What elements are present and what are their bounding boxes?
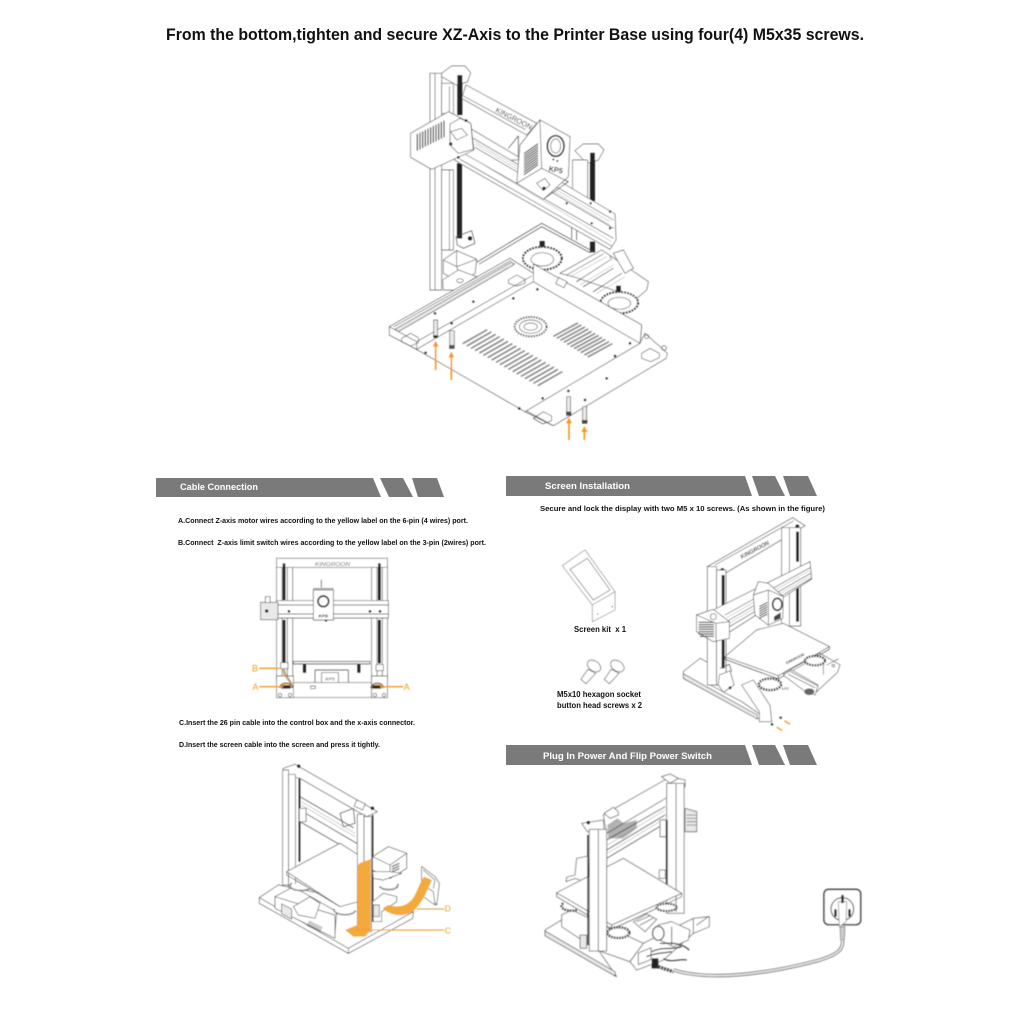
screen kit and screw parts: [562, 550, 626, 684]
left column: [283, 770, 295, 888]
base: [259, 885, 413, 953]
orange cable C: [345, 859, 371, 937]
callout D: D: [445, 904, 451, 914]
bed and base: [277, 661, 387, 698]
rear frame and gantry: [603, 774, 697, 913]
icon: hexagon socket screws: [581, 658, 626, 684]
diagram: front view with motor and limit switch callouts: [252, 558, 410, 698]
base: [545, 910, 709, 977]
screen instruction text: Secure and lock the display with two M5 x 10 screws. (As shown in the figure): [540, 504, 826, 513]
top beam: KINGROON: [740, 540, 771, 561]
print head: KP5: [318, 613, 328, 619]
bed leveling wheel rear: [523, 241, 562, 270]
callout A right: [380, 682, 410, 692]
callout A left: [252, 682, 283, 692]
heated bed: KINGROON: [785, 652, 805, 665]
callout A left: A: [252, 682, 258, 692]
orange screw arrows: [777, 721, 790, 731]
left column: [707, 567, 726, 685]
section header: Plug In Power And Flip Power Switch: [506, 745, 817, 765]
title: From the bottom,tighten and secure XZ-Axis to the Printer Base using four(4) M5x35 screws.: [166, 26, 864, 44]
top plate and beam: [442, 66, 537, 135]
print head carriage: [753, 582, 783, 625]
frame: KINGROON: [315, 562, 350, 568]
callout C: [355, 926, 451, 936]
y rail and motor block: [782, 670, 818, 695]
x gantry: [713, 562, 812, 632]
leveling wheels: [759, 656, 825, 690]
screws label: [557, 689, 642, 710]
callout B: B: [252, 664, 258, 674]
diagram: assembled printer with screen screws: [683, 518, 840, 731]
diagram: XZ-axis mounted on printer base from below: [389, 66, 667, 440]
instructions A and B: A.Connect Z-axis motor wires according to the yellow label on the 6-pin (4 wires) port.: [178, 518, 468, 525]
screws label: button head screws x 2: [557, 700, 642, 710]
instructions A and B: [178, 518, 486, 547]
screws label: M5x10 hexagon socket: [557, 689, 641, 699]
section header: Cable Connection: [156, 478, 444, 497]
instructions C and D: D.Insert the screen cable into the screen and press it tightly.: [179, 742, 380, 749]
icon: screen kit: [562, 550, 615, 622]
callout B: [252, 664, 281, 674]
front left column: [580, 820, 607, 951]
top plate and beam: KINGROON: [494, 105, 534, 132]
base plate: [683, 658, 772, 722]
diagram: power cable and switch: [545, 774, 861, 977]
rear base block: [783, 653, 840, 692]
orange cable D: [383, 877, 432, 915]
x motor housing: [697, 609, 729, 642]
callout D: [417, 904, 451, 914]
print head carriage: [508, 120, 570, 199]
base vent slots left: [463, 330, 562, 385]
left lead screw: [457, 75, 462, 238]
screws: [433, 320, 587, 424]
power cord: [673, 927, 845, 976]
screen module: [422, 867, 439, 905]
front screen bracket: [742, 680, 772, 722]
right column: [782, 528, 801, 626]
print head: [313, 580, 333, 622]
printer base plate underside: [389, 258, 667, 426]
bed and base: KP5: [325, 677, 335, 683]
base front strip: [683, 674, 757, 719]
left motor housing: [566, 856, 589, 883]
power switch and outlet: [638, 948, 673, 972]
section header: Plug In Power And Flip Power Switch: Plug In Power And Flip Power Switch: [543, 751, 712, 762]
bed: [287, 843, 398, 915]
diagram: 26 pin and screen cable routing: [259, 764, 451, 953]
callout A right: A: [404, 682, 410, 692]
Z motor and lead coupling: [443, 231, 477, 290]
print head carriage: KP5: [548, 164, 564, 175]
X gantry: [261, 597, 388, 620]
instructions A and B: B.Connect Z-axis limit switch wires according to the yellow label on the 3-pin (2wires) port.: [178, 540, 486, 547]
base center ring: [515, 317, 547, 336]
orange arrows: [433, 341, 587, 440]
section header: Cable Connection: Cable Connection: [180, 482, 258, 493]
instructions C and D: [179, 720, 415, 749]
X-axis beam: [450, 128, 616, 249]
y rail and motor: [633, 914, 690, 947]
back frame and gantry: [283, 764, 377, 862]
small screws: [771, 716, 782, 726]
section header: Screen Installation: Screen Installation: [545, 481, 630, 492]
X-axis motor housing: [411, 112, 474, 169]
base vent slots right: [554, 323, 612, 357]
base rear frame: [475, 223, 593, 263]
callout C: C: [445, 926, 451, 936]
y rail and motor block: KP5: [782, 687, 790, 691]
right column and motor: [357, 814, 407, 932]
heated bed: [557, 858, 682, 938]
frame: [277, 558, 387, 681]
right upright and lead screw: [572, 144, 604, 252]
instructions C and D: C.Insert the 26 pin cable into the control box and the x-axis connector.: [179, 720, 415, 727]
top beam: [707, 518, 805, 574]
Y-axis rail and block: [560, 250, 648, 313]
z motor: [718, 664, 734, 692]
screen kit label: Screen kit x 1: [574, 624, 626, 634]
icon: wall socket with plug: [824, 889, 861, 927]
left upright column: [430, 73, 453, 290]
section header: Screen Installation: [506, 476, 817, 496]
heated bed: [725, 623, 829, 679]
hand-drawn wires: [647, 943, 689, 961]
